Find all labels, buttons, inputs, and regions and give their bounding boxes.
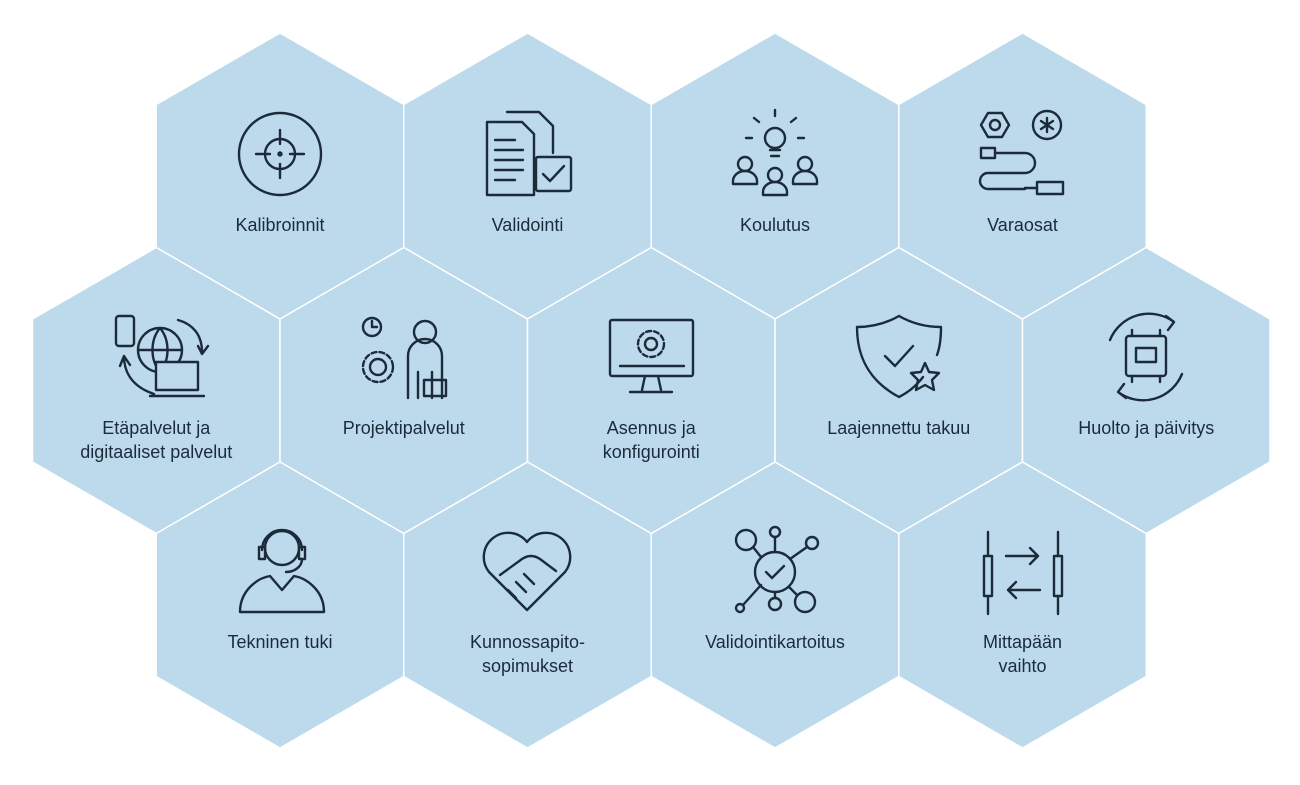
label: Validointi: [492, 215, 563, 235]
hex: Koulutus: [651, 33, 899, 319]
label: Validointikartoitus: [705, 632, 845, 652]
icon: shield star: [857, 316, 941, 397]
icon: parts: [980, 111, 1063, 194]
hex: Asennus: konfigurointi: [603, 442, 700, 462]
hex: Kunnossapito: [404, 462, 651, 748]
hex: Mittapään vaihto: [899, 462, 1146, 748]
icon: person gear clock: [363, 318, 446, 398]
label: Asennus ja: [607, 418, 697, 438]
icon: monitor gear: [610, 320, 693, 392]
hex: Kunnossapito: sopimukset: [482, 656, 573, 676]
hex: Kalibroinnit: [156, 33, 404, 319]
label: Tekninen tuki: [227, 632, 333, 652]
hex: Mittapään vaihto: vaihto: [998, 656, 1047, 676]
label: Projektipalvelut: [343, 418, 465, 438]
hex: Projektipalvelut: [280, 248, 528, 534]
label: Huolto ja päivitys: [1078, 418, 1214, 438]
icon: heart handshake: [484, 533, 570, 610]
icon: target: [239, 113, 321, 195]
hex: Laajennettu takuu: [775, 248, 1022, 534]
icon: chip rotate: [1110, 314, 1182, 400]
label: Etäpalvelut ja: [102, 418, 211, 438]
hex: Huolto: [1022, 248, 1270, 534]
hex: Varaosat: [899, 33, 1146, 319]
label: Laajennettu takuu: [827, 418, 970, 438]
hex: Etäpalvelut: [32, 248, 280, 534]
icon: headset person: [240, 530, 324, 612]
label: Mittapään: [983, 632, 1062, 652]
icon: probes arrows: [984, 532, 1062, 614]
icon: network check: [736, 527, 818, 612]
icon: people with bulb: [733, 110, 817, 195]
hex: Etäpalvelut: digitaaliset palvelut: [80, 442, 232, 462]
hex: Tekninen tuki: [156, 462, 404, 748]
label: Varaosat: [987, 215, 1058, 235]
label: Koulutus: [740, 215, 810, 235]
hex: Validointikartoitus: [651, 462, 899, 748]
hex: Validointi: [404, 33, 651, 319]
icon: documents: [487, 112, 571, 195]
hex: Asennus: [528, 248, 775, 534]
label: Kunnossapito-: [470, 632, 585, 652]
icon: globe devices: [116, 316, 208, 396]
label: Kalibroinnit: [235, 215, 325, 235]
